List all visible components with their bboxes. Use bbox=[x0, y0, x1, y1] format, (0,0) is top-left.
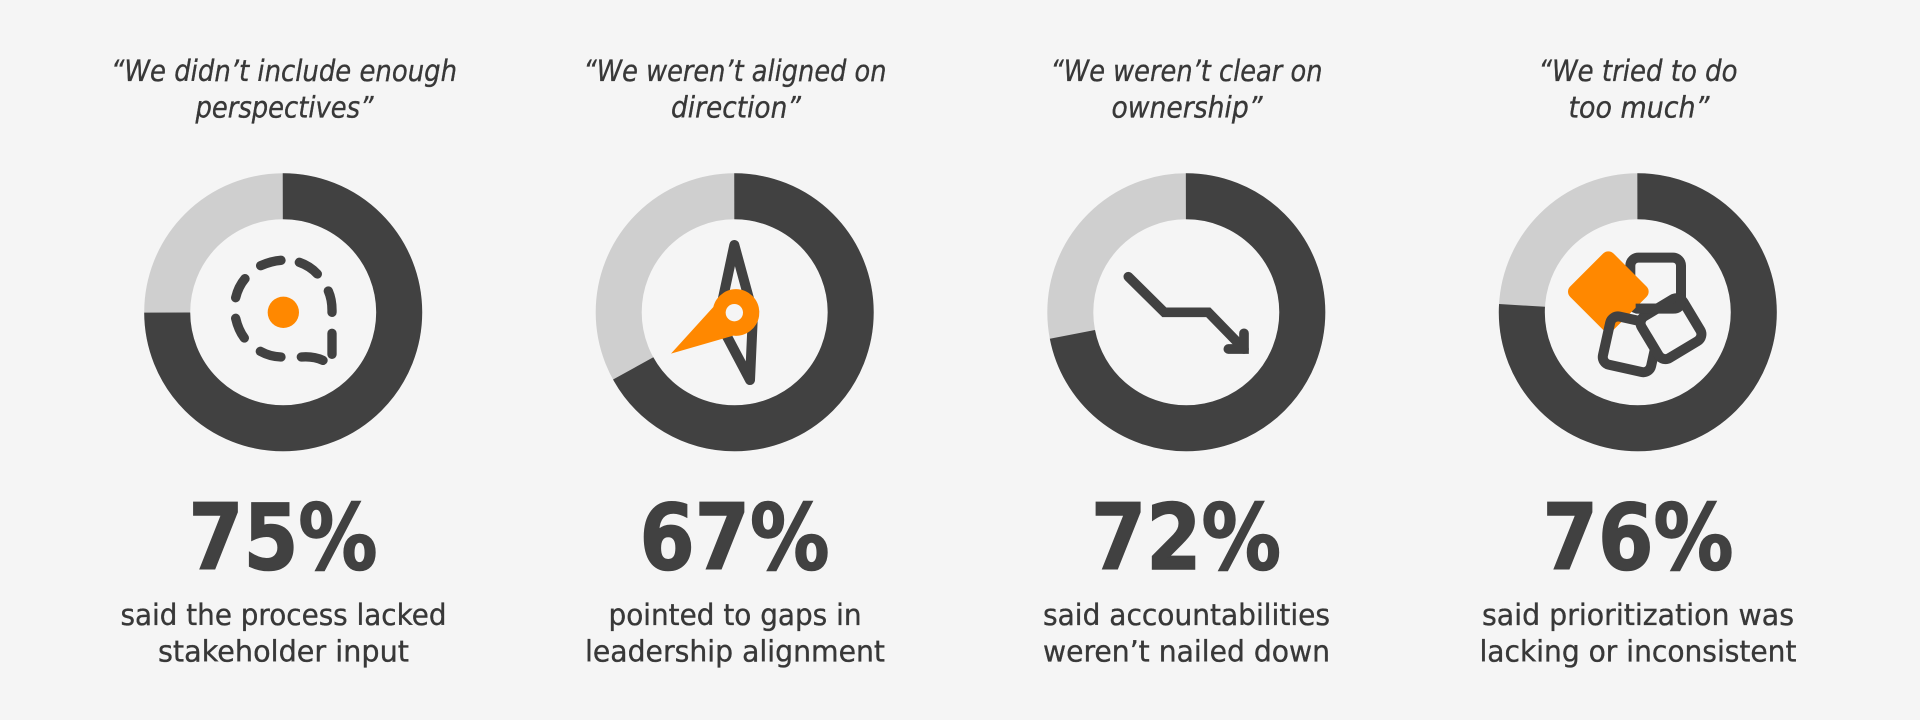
panel: leadership alignment bbox=[584, 54, 886, 668]
description: stakeholder input: stakeholder input bbox=[158, 634, 409, 668]
panel: stakeholder input bbox=[111, 54, 457, 668]
description: stakeholder input: said the process lacked bbox=[120, 598, 446, 632]
panel: accountabilities bbox=[1043, 54, 1330, 668]
icon: dashed circle with orange dot bbox=[236, 260, 332, 360]
donut chart: 76% bbox=[1522, 196, 1754, 428]
donut chart: 75% bbox=[167, 196, 399, 428]
description: prioritization bbox=[1480, 598, 1796, 668]
stat: 76%: 76% bbox=[1542, 486, 1734, 591]
description: leadership alignment: leadership alignment bbox=[585, 634, 885, 668]
description: accountabilities: said accountabilities bbox=[1043, 598, 1330, 632]
description: stakeholder input bbox=[120, 598, 446, 668]
icon: compass bbox=[671, 245, 759, 380]
description: accountabilities: weren’t nailed down bbox=[1043, 634, 1330, 668]
quote: ownership: “We weren’t clear on bbox=[1050, 54, 1322, 88]
icon: descending arrow bbox=[1128, 277, 1244, 349]
quote: too much: too much” bbox=[1568, 90, 1710, 124]
donut chart: 72% bbox=[1070, 196, 1302, 428]
quote: perspectives bbox=[111, 54, 457, 124]
quote: perspectives: “We didn’t include enough bbox=[111, 54, 457, 88]
quote: too much: “We tried to do bbox=[1538, 54, 1738, 88]
quote: ownership bbox=[1050, 54, 1322, 124]
panel: prioritization bbox=[1480, 54, 1796, 668]
description: accountabilities bbox=[1043, 598, 1330, 668]
stat: 75%: 75% bbox=[188, 486, 378, 591]
description: leadership alignment bbox=[585, 598, 885, 668]
quote: direction: “We weren’t aligned on bbox=[584, 54, 886, 88]
quote: direction bbox=[584, 54, 886, 124]
description: prioritization: lacking or inconsistent bbox=[1480, 634, 1796, 668]
quote: too much bbox=[1538, 54, 1738, 124]
stat: 72%: 72% bbox=[1091, 486, 1281, 591]
description: prioritization: said prioritization was bbox=[1482, 598, 1794, 632]
stat: 67%: 67% bbox=[640, 486, 830, 591]
quote: perspectives: perspectives” bbox=[195, 90, 374, 124]
quote: direction: direction” bbox=[671, 90, 802, 124]
description: leadership alignment: pointed to gaps in bbox=[608, 598, 862, 632]
quote: ownership: ownership” bbox=[1112, 90, 1263, 124]
icon: stacked squares with orange diamond bbox=[1565, 248, 1704, 374]
donut chart: 67% bbox=[619, 196, 851, 428]
